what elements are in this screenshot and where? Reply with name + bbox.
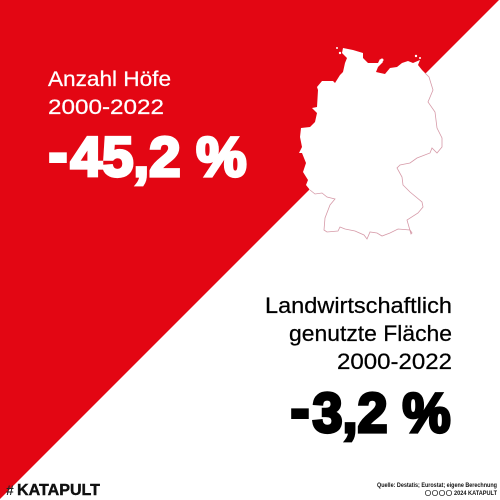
heading: 2000-2022 (area): 2000-2022 <box>337 349 452 374</box>
heading: Landwirtschaftlich: Landwirtschaftlich <box>265 293 452 318</box>
figure: -3,2 %: 3,2 % <box>312 381 450 444</box>
logo hash mark: # <box>6 482 14 498</box>
licence icons <box>425 490 452 496</box>
figure: -45,2 %: - <box>49 121 67 184</box>
figure: -3,2 %: - <box>291 377 309 440</box>
map of Germany <box>299 47 442 239</box>
heading: Anzahl Höfe: Anzahl Höfe <box>48 68 171 91</box>
heading: genutzte Fläche: genutzte Fläche <box>289 321 452 346</box>
figure: -45,2 %: 45,2 % <box>70 125 246 188</box>
copyright note <box>425 490 497 497</box>
heading: 2000-2022 (farms): 2000-2022 <box>48 96 164 119</box>
logo: KATAPULT <box>6 482 101 499</box>
logo wordmark: KATAPULT <box>17 482 101 499</box>
